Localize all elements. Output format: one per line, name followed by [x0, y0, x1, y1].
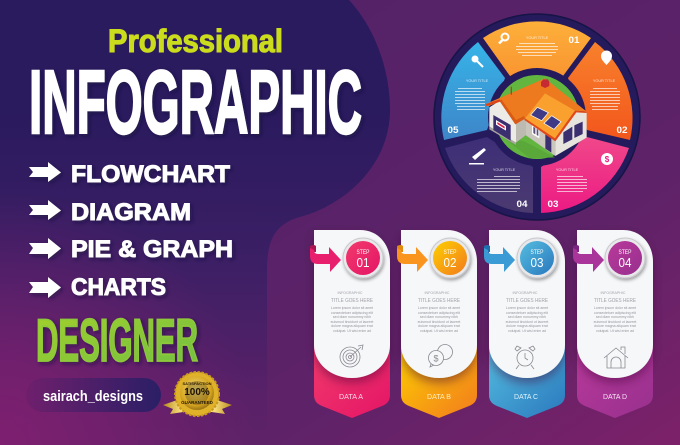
icon: arrow diagram — [29, 200, 61, 220]
ribbon arrow — [484, 245, 515, 272]
card text: sed diam nonummy nibh — [333, 315, 371, 319]
ribbon arrow — [573, 245, 604, 272]
house shadow ground — [500, 135, 555, 158]
coloured base — [489, 345, 565, 418]
card text: euismod tincidunt ut laoreet — [594, 320, 636, 324]
coloured base — [401, 345, 477, 418]
card text: sed diam nonummy nibh — [596, 315, 634, 319]
segment 03 — [541, 137, 629, 213]
ribbon arrow — [310, 245, 341, 272]
step circle: 03 — [530, 255, 544, 270]
coloured base — [314, 345, 390, 418]
card text: euismod tincidunt ut laoreet — [418, 320, 460, 324]
card text: consectetuer adipiscing elit — [506, 311, 548, 315]
label: DATA C: DATA C — [514, 392, 539, 401]
badge: 100% guaranteed: 100% — [184, 387, 210, 398]
card text: INFOGRAPHIC — [338, 291, 363, 295]
right wall — [555, 112, 587, 156]
icon: pen — [469, 148, 486, 164]
label: DATA A: DATA A — [339, 392, 363, 401]
card text: Lorem ipsum dolor sit amet — [506, 306, 548, 310]
card text: Lorem ipsum dolor sit amet — [331, 306, 373, 310]
front recessed wall — [516, 118, 526, 143]
icon: location pin — [601, 50, 612, 65]
segment 01 — [483, 21, 591, 76]
label: PIE & GRAPH: PIE & GRAPH — [71, 236, 233, 263]
card text: dolore magna aliquam erat — [594, 324, 636, 328]
label: DATA B: DATA B — [427, 392, 451, 401]
white panel — [401, 230, 477, 378]
segment 02: YOUR TITLE — [593, 79, 616, 83]
segment 01: 01 — [568, 35, 580, 45]
card text: euismod tincidunt ut laoreet — [331, 320, 373, 324]
segment 02: 02 — [616, 125, 628, 135]
badge: 100% guaranteed: GUARANTEED — [181, 400, 214, 405]
icon: alarm clock — [515, 346, 535, 369]
card text: volutpat. Ut wisi enim ad — [596, 329, 634, 333]
step circle: STEP — [530, 250, 544, 256]
segment 05: YOUR TITLE — [466, 79, 489, 83]
step circle: 04 — [618, 255, 632, 270]
window — [532, 125, 539, 138]
card text: dolore magna aliquam erat — [418, 324, 460, 328]
icon: dollar speech bubbles — [428, 344, 452, 367]
step card 2 — [397, 230, 477, 418]
solar panels — [531, 107, 548, 121]
card text: volutpat. Ut wisi enim ad — [420, 329, 458, 333]
label: DATA D: DATA D — [603, 392, 628, 401]
step circle: 01 — [356, 255, 370, 270]
feature list — [29, 161, 233, 301]
step circle: STEP — [618, 250, 632, 256]
step circle — [605, 238, 645, 278]
icon: magnifier — [499, 34, 508, 44]
step circle: STEP — [356, 250, 370, 256]
label: DIAGRAM: DIAGRAM — [71, 199, 191, 226]
segment 01: YOUR TITLE — [526, 36, 549, 40]
door — [545, 132, 551, 153]
step card 3 — [484, 230, 565, 418]
card text: volutpat. Ut wisi enim ad — [333, 329, 371, 333]
username pill — [26, 378, 161, 412]
segment 04: 04 — [516, 199, 528, 209]
white panel — [314, 230, 390, 378]
step circle: 02 — [444, 255, 456, 270]
coloured base — [577, 345, 653, 418]
card text — [594, 291, 636, 333]
ribbon arrow — [397, 245, 428, 272]
card text: dolore magna aliquam erat — [506, 324, 548, 328]
card text: consectetuer adipiscing elit — [418, 311, 460, 315]
title: Professional: Professional — [108, 23, 283, 59]
house — [485, 78, 587, 158]
heading: DESIGNER: DESIGNER — [36, 307, 198, 374]
card text: sed diam nonummy nibh — [420, 315, 458, 319]
card text: INFOGRAPHIC — [425, 291, 450, 295]
sale sign — [496, 120, 506, 131]
step circle — [517, 238, 557, 278]
step card 4 — [573, 230, 653, 418]
step circle — [343, 238, 383, 278]
card text: TITLE GOES HERE — [594, 298, 636, 304]
segment 05 — [441, 42, 505, 140]
icon: arrow charts — [29, 277, 61, 298]
icon: arrow flowchart — [29, 162, 61, 182]
step circle: STEP — [444, 250, 456, 256]
label: CHARTS: CHARTS — [71, 274, 166, 301]
icon: target — [340, 345, 363, 367]
card text: dolore magna aliquam erat — [331, 324, 373, 328]
card text: sed diam nonummy nibh — [508, 315, 546, 319]
segment 03: 03 — [548, 199, 558, 209]
circular diagram — [434, 14, 640, 220]
light roof plane — [525, 93, 575, 138]
card text: TITLE GOES HERE — [418, 298, 460, 304]
step card 1 — [310, 230, 390, 418]
card text — [331, 291, 373, 333]
middle wall — [526, 118, 555, 156]
card text — [418, 291, 460, 333]
card text: euismod tincidunt ut laoreet — [506, 320, 548, 324]
step circle — [430, 238, 470, 278]
username pill: sairach_designs — [43, 388, 143, 405]
segment 04 — [445, 137, 533, 213]
badge: 100% guaranteed — [163, 372, 232, 416]
card text: Lorem ipsum dolor sit amet — [418, 306, 460, 310]
card text: consectetuer adipiscing elit — [331, 311, 373, 315]
roof dark edge — [500, 99, 525, 124]
badge: 100% guaranteed: SATISFACTION — [182, 381, 212, 386]
main roof — [485, 78, 587, 139]
icon: key — [472, 56, 483, 67]
icon: dollar coin: $ — [605, 155, 610, 164]
card text: TITLE GOES HERE — [506, 298, 548, 304]
card text: TITLE GOES HERE — [331, 298, 373, 304]
card text: consectetuer adipiscing elit — [594, 311, 636, 315]
chimneys — [541, 79, 549, 88]
card text — [506, 291, 548, 333]
segment 02 — [568, 42, 633, 140]
title: INFOGRAPHIC: INFOGRAPHIC — [29, 53, 362, 153]
card text: INFOGRAPHIC — [513, 291, 538, 295]
label: FLOWCHART: FLOWCHART — [71, 161, 230, 188]
hub ring and lawn — [488, 68, 586, 166]
right windows — [563, 127, 572, 144]
icon: house outline — [604, 347, 628, 368]
segment 04: YOUR TITLE — [493, 168, 516, 172]
card text: volutpat. Ut wisi enim ad — [508, 329, 546, 333]
card text: INFOGRAPHIC — [601, 291, 626, 295]
segment 03: YOUR TITLE — [556, 168, 579, 172]
icon: dollar speech bubbles: $ — [433, 354, 439, 364]
card text: Lorem ipsum dolor sit amet — [594, 306, 636, 310]
segment 05: 05 — [448, 125, 458, 135]
white panel — [577, 230, 653, 378]
icon: arrow pie and graph — [29, 238, 61, 259]
garage door — [493, 115, 511, 141]
white panel — [489, 230, 565, 378]
left gable wall — [489, 101, 516, 143]
